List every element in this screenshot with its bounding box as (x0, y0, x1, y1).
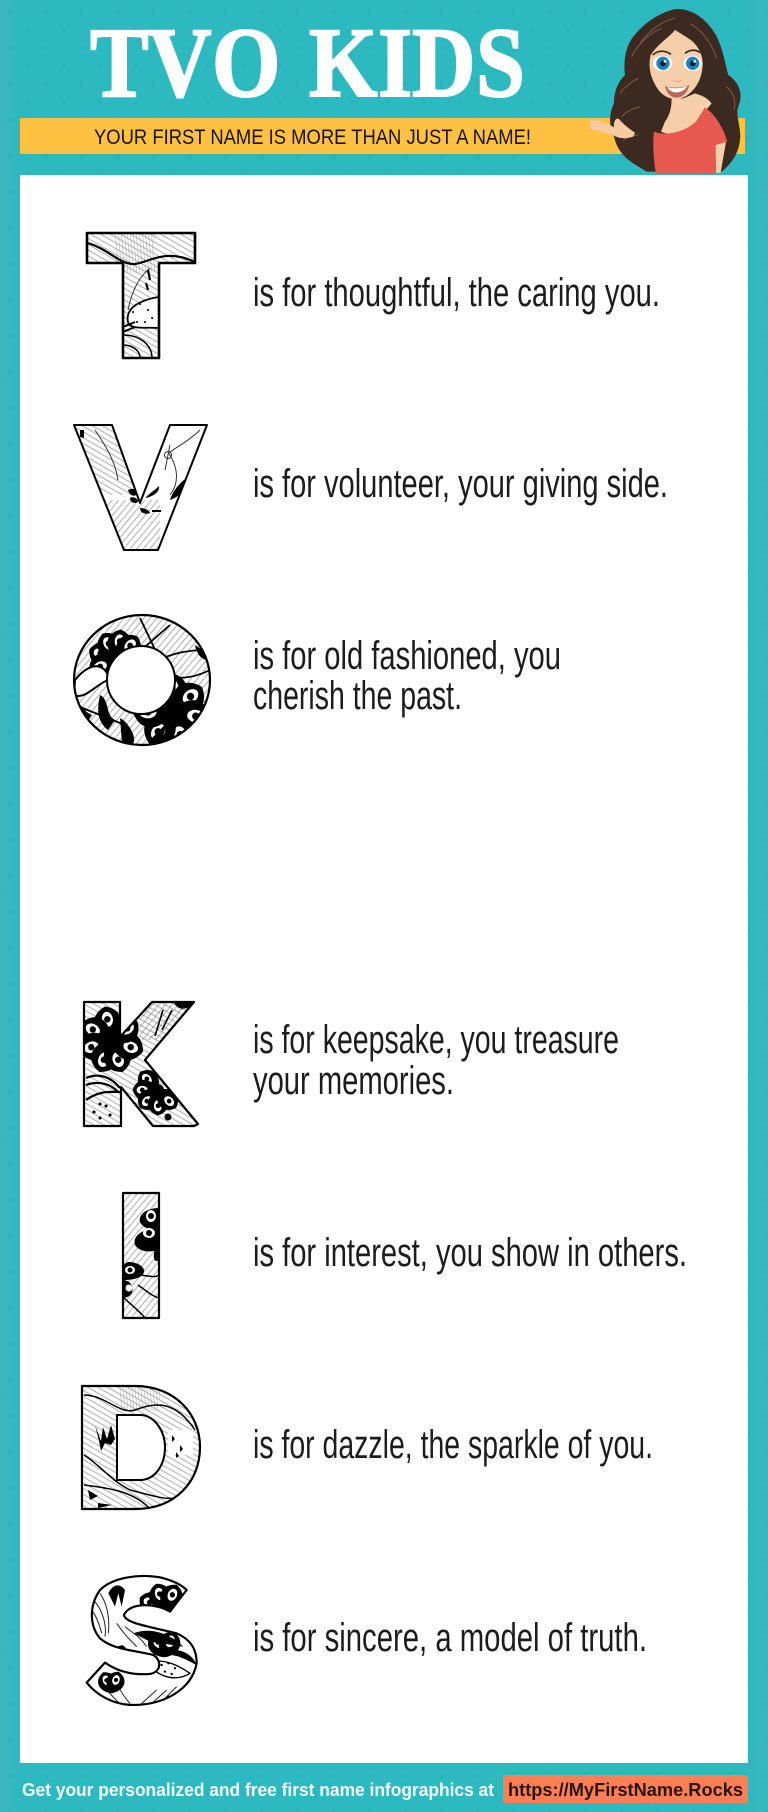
letter D (82, 1386, 200, 1509)
mascot: cartoon woman (590, 9, 741, 174)
letter K (74, 1000, 199, 1127)
letter T (87, 233, 195, 358)
footer URL badge: https://MyFirstName.Rocks (508, 1779, 743, 1800)
title: TVO KIDS (90, 8, 525, 118)
letter S (83, 1570, 200, 1710)
subtitle banner (20, 118, 745, 154)
letter O (74, 615, 213, 754)
footer text: Get your personalized and free first name infographics at (22, 1779, 494, 1800)
subtitle banner: YOUR FIRST NAME IS MORE THAN JUST A NAME! (94, 126, 531, 149)
text: K lines: is for keepsake, you treasure (253, 1018, 619, 1062)
text: O lines: cherish the past. (253, 674, 462, 718)
text: O lines: is for old fashioned, you (253, 634, 561, 678)
letter V (74, 425, 207, 550)
text: K lines (253, 1018, 619, 1103)
letter I (122, 1193, 159, 1318)
white content panel (20, 175, 748, 763)
text: K lines: your memories. (253, 1059, 454, 1103)
text: O lines (253, 634, 561, 718)
